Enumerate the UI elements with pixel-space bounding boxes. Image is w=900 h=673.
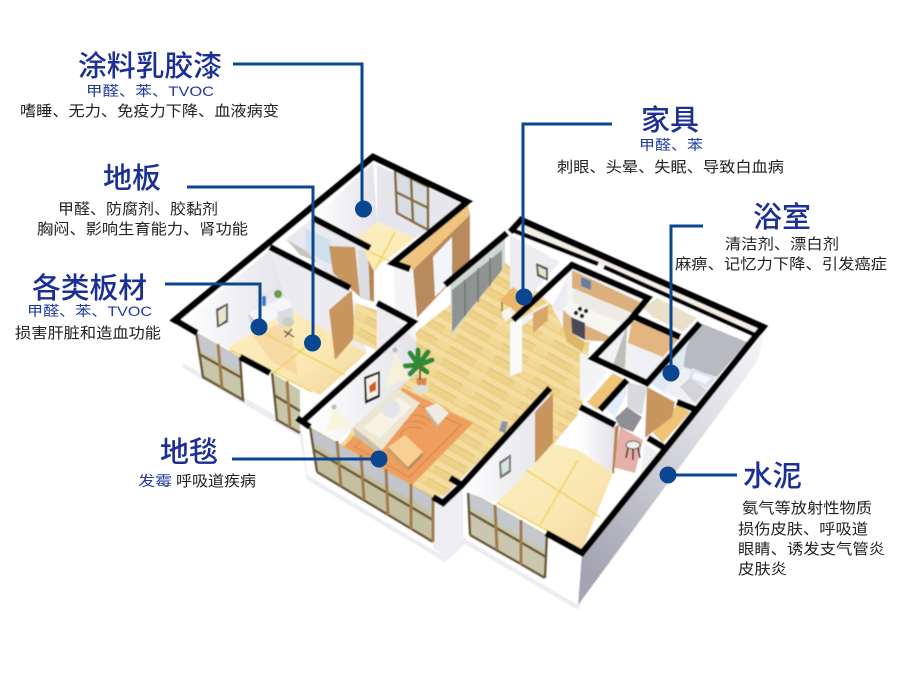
door wood [329,246,360,297]
label: floor [37,162,248,238]
glass sliding doors [450,235,505,335]
living room back wall [310,318,418,455]
label: cement: 氨气等放射性物质 [742,499,872,517]
bedroom floor [497,444,613,550]
building base [175,157,763,605]
label: carpet: 地毯 [160,436,218,469]
label: cement: 水泥 [743,460,802,493]
label: paint [20,50,279,120]
bedroom back wall [460,390,553,503]
closet [413,212,470,318]
lower cabinet left [563,310,572,333]
label: furniture: 刺眼、头晕、失眠、导致白血病 [557,159,784,176]
storage white panel [633,347,663,378]
storage room [597,322,680,378]
label: boards: 甲醛、苯、TVOC [27,303,152,319]
door jamb [612,424,619,474]
label: paint: 嗜睡、无力、免疫力下降、血液病变 [20,103,279,120]
leader: cement [660,466,737,484]
trash bin [499,421,508,433]
toilet room back wall [627,382,647,415]
wall lamps [325,348,410,432]
left windows [196,332,243,400]
bathroom tile wall [683,322,747,377]
partition pillar [394,262,416,342]
kitchen base [552,265,648,342]
bedroom painting [499,454,511,479]
backsplash tile [573,288,630,323]
lower cabinet right [585,325,613,342]
hall wall [377,305,410,350]
roof cream strips [514,220,763,336]
ottoman [425,403,449,429]
leader: carpet [232,450,388,468]
dining wall [510,235,560,315]
left painting [216,303,228,328]
label: cement [738,460,885,578]
left bedroom right wall [270,250,367,353]
leader: bathroom [662,226,703,382]
label: cement: 眼睛、诱发支气管炎 [738,541,885,558]
label: furniture: 甲醛、苯 [639,137,703,153]
upper cabinets [572,270,640,313]
rug rings [355,398,461,477]
door frame panel [358,250,372,302]
dining table [500,287,533,322]
leader: furniture [516,124,612,306]
label: cement: 损伤皮肤、呼吸道 [738,521,868,538]
label: bathroom [675,201,887,273]
bedroom windows [468,490,547,578]
label: cement: 皮肤炎 [738,561,787,578]
closet top [400,205,470,270]
wood floor [325,262,590,497]
rug [343,388,473,487]
bathroom left wall [650,343,687,392]
door wood [645,387,675,438]
living room windows [310,427,433,542]
desk [248,290,294,337]
top bedroom floor [358,222,415,270]
bedroom door [535,393,553,463]
sofa [353,388,420,456]
label: carpet [138,436,256,490]
right corner wall [640,443,658,477]
counter [563,302,625,338]
label: bathroom: 麻痹、记忆力下降、引发癌症 [675,256,887,273]
top bedroom window wall [377,165,465,238]
label: boards: 各类板材 [32,272,147,305]
front white wall [578,410,615,473]
left bedroom door [329,290,355,360]
label: boards: 损害肝脏和造血功能 [15,325,161,342]
left bedroom back walls [183,250,290,348]
label: floor: 地板 [103,162,161,195]
label: carpet: 呼吸道疾病 [176,473,256,490]
bathtub [688,368,717,388]
kitchen [552,265,648,342]
coffee table [388,435,423,471]
partition white [580,353,607,400]
label: bathroom: 浴室 [753,201,811,234]
toilet floor [615,407,642,432]
beige room [643,298,697,332]
leader lines and dots [165,64,737,484]
wood step 2 [653,405,690,443]
stool [626,441,640,460]
label: paint: 甲醛、苯、TVOC [86,83,214,99]
top bedroom walls [315,163,377,237]
stove burners [574,307,588,318]
kitchen side wall [552,282,567,312]
palm plant [405,350,432,393]
left bedroom floor [227,310,367,395]
closet white door [433,237,452,297]
label: furniture [557,104,784,176]
bathroom floor [663,367,717,405]
wood step 1 [587,373,625,410]
door jamb [368,248,374,302]
floor plan illustration [175,157,765,610]
painting [364,371,380,404]
sink [680,378,707,403]
label: floor: 甲醛、防腐剂、胶黏剂 [58,200,218,218]
label: bathroom: 清洁剂、漂白剂 [725,236,839,253]
small bath behind door [285,218,368,295]
toilet room left wall [603,380,627,417]
storage inner [613,325,627,368]
pillar [510,302,548,376]
shadow under kitchen [563,327,585,352]
kitchen window [581,277,591,290]
leader: boards [165,284,268,336]
label: carpet: 发霉 [138,473,172,489]
front wall segments [433,482,463,557]
leader: floor [187,187,321,352]
label: boards [15,272,161,342]
outer right wall face [578,332,765,605]
oven [571,317,585,340]
leader: paint [233,64,372,218]
storage shelf [628,320,680,357]
soft ground shadow [183,358,582,610]
label: floor: 胸闷、影响生育能力、肾功能 [37,221,248,238]
label: paint: 涂料乳胶漆 [78,50,222,83]
small painting [536,263,548,281]
hall wood floor [353,303,377,350]
label: furniture: 家具 [641,104,699,137]
top bedroom window [395,170,428,230]
pink floor [613,427,643,473]
back inner wall line [512,230,755,335]
left windows 2 [272,373,300,433]
black wall tops [175,157,763,553]
